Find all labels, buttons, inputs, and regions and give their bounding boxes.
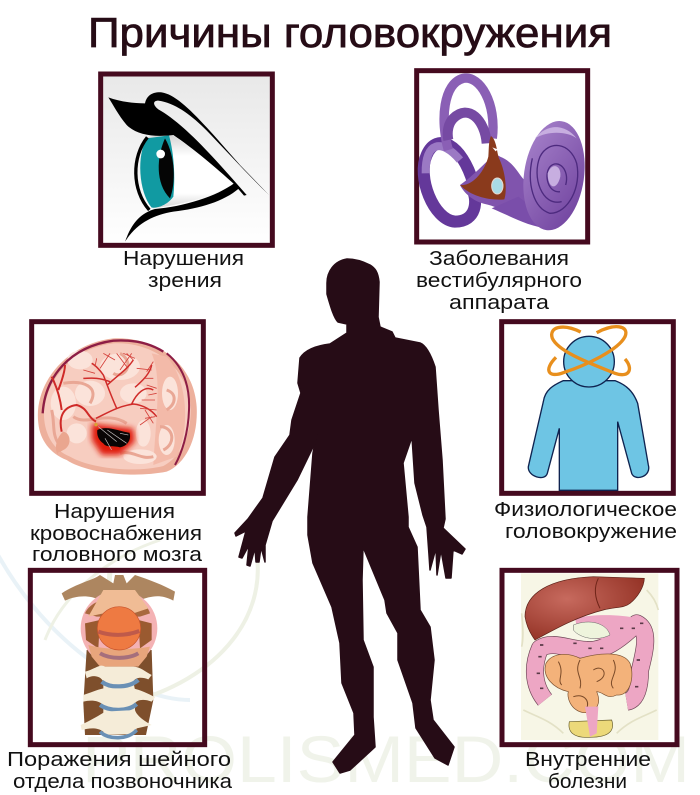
label: vision disorders: Нарушения	[123, 248, 244, 270]
panel: person (physiological vertigo)	[502, 322, 673, 493]
icon: brain with vessels	[38, 338, 197, 475]
panel: internal organs	[502, 570, 677, 745]
background watermark	[0, 540, 690, 795]
label: cervical spine lesions: Поражения шейного	[7, 749, 231, 771]
icon: digestive organs	[521, 573, 658, 740]
human silhouette	[235, 259, 465, 773]
label: blood supply disorders: головного мозга	[32, 544, 203, 566]
label: cervical spine lesions: отдела позвоночника	[13, 771, 233, 793]
label: internal diseases: болезни	[548, 771, 627, 793]
label: cervical spine lesions	[7, 749, 233, 793]
label: vestibular disease: Заболевания	[429, 248, 569, 270]
icon: dizzy person	[528, 327, 649, 490]
icon: cervical spine	[62, 575, 175, 738]
panel: brain (blood supply)	[32, 322, 203, 493]
icon: eye	[108, 92, 269, 242]
panel: inner ear (vestibular disease)	[417, 71, 591, 242]
background watermark: PROLISMED.COM	[82, 722, 690, 795]
label: physiological vertigo: головокружение	[505, 521, 677, 543]
label: internal diseases: Внутренние	[525, 749, 651, 771]
label: physiological vertigo: Физиологическое	[494, 499, 677, 521]
panel: cervical spine	[30, 570, 205, 745]
label: physiological vertigo	[494, 499, 677, 543]
icon: inner ear	[424, 78, 591, 234]
title: Причины головокружения	[88, 9, 612, 56]
label: vision disorders: зрения	[148, 270, 222, 292]
label: vestibular disease: вестибулярного	[416, 270, 582, 292]
label: vision disorders	[123, 248, 244, 292]
label: blood supply disorders	[30, 501, 203, 566]
panel: eye (vision disorders)	[101, 74, 272, 245]
label: blood supply disorders: кровоснабжения	[30, 523, 202, 545]
label: internal diseases	[525, 749, 651, 793]
label: blood supply disorders: Нарушения	[54, 501, 175, 523]
label: vestibular disease	[416, 248, 582, 314]
label: vestibular disease: аппарата	[449, 292, 550, 314]
